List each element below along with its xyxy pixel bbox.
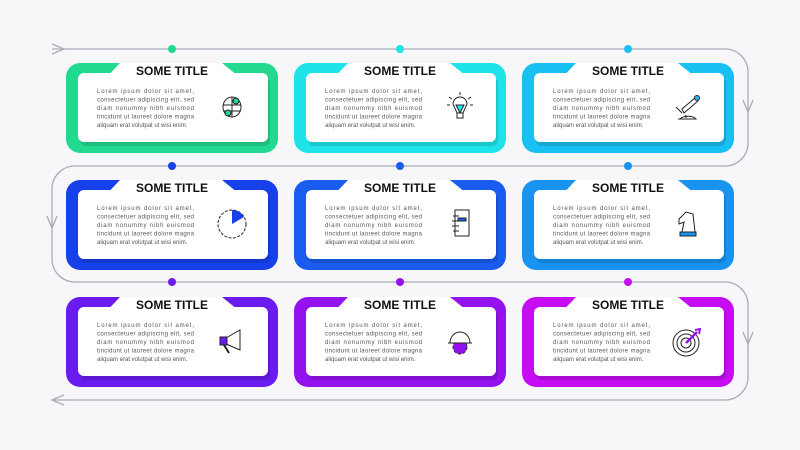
card 8 <box>294 297 506 387</box>
icon: brain <box>223 97 241 117</box>
card 9 <box>522 297 734 387</box>
icon: target <box>673 329 700 356</box>
card 5: SOME TITLE <box>364 181 436 195</box>
card 8: SOME TITLE <box>364 298 436 312</box>
card 6 <box>522 180 734 270</box>
card 4 <box>66 180 278 270</box>
card 3 <box>522 63 734 153</box>
card 2 <box>294 63 506 153</box>
path line <box>47 44 753 405</box>
card 2: SOME TITLE <box>364 64 436 78</box>
card 1 <box>66 63 278 153</box>
icon: hand with paper <box>452 210 469 236</box>
card 6: SOME TITLE <box>592 181 664 195</box>
card 4: SOME TITLE <box>136 181 208 195</box>
icon: microscope <box>676 96 700 119</box>
dots <box>168 45 632 286</box>
icon: chess knight <box>679 212 696 236</box>
card 9: SOME TITLE <box>592 298 664 312</box>
card 3: SOME TITLE <box>592 64 664 78</box>
icon: helmet gear <box>448 332 472 354</box>
icon: megaphone <box>220 330 240 353</box>
card 7 <box>66 297 278 387</box>
icon: bulb <box>447 92 473 118</box>
icon: clock <box>218 210 246 238</box>
card 1: SOME TITLE <box>136 64 208 78</box>
card 5 <box>294 180 506 270</box>
card 7: SOME TITLE <box>136 298 208 312</box>
